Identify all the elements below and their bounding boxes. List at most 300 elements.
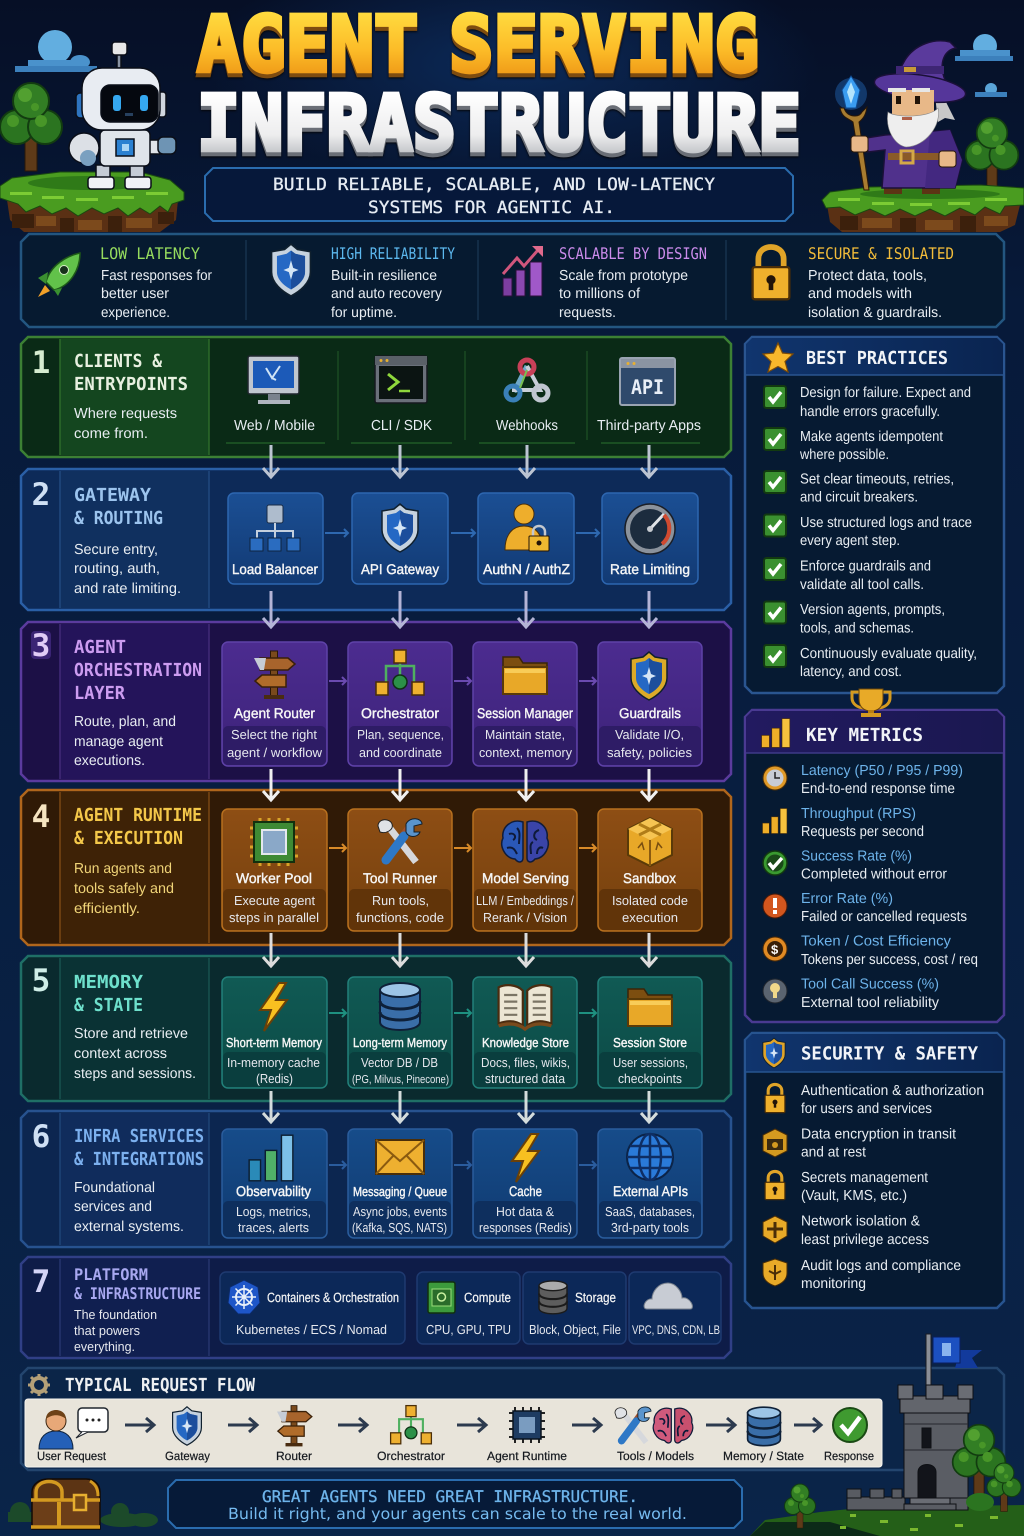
quality: high reliability: HIGH RELIABILITY [331,244,455,263]
card: session manager: context, memory [479,745,572,760]
metric: token cost [763,934,978,968]
layer heading: & INFRASTRUCTURE [74,1284,201,1303]
flow arrow [794,1418,821,1432]
flow step: user request: User Request [37,1449,107,1463]
icon: user with speech bubble [39,1408,108,1449]
item: audit logs: Audit logs and compliance [801,1258,961,1274]
card: load balancer [228,493,323,584]
flow step: orchestrator [377,1406,445,1463]
flow arrow [706,1418,735,1432]
subtitle banner: BUILD RELIABLE, SCALABLE, AND LOW-LATENCY [273,175,715,195]
item: authentication: Authentication & authorization [801,1083,984,1099]
card: tool runner: Tool Runner [363,870,437,886]
layer number 6: 6 [32,1119,50,1155]
icon: folder [628,989,672,1026]
layer heading: ORCHESTRATION [74,660,202,681]
layer heading [74,1126,204,1170]
icon: rocket [38,253,80,297]
layer number 5: 5 [32,963,50,999]
layer heading: & STATE [74,995,143,1016]
ground [750,1505,1024,1536]
layer heading [74,485,163,529]
metric: throughput [763,806,924,840]
card: session store [598,977,702,1088]
card: load balancer: Load Balancer [232,561,318,577]
treasure chest with bushes [8,1479,158,1529]
card: guardrails: Guardrails [619,705,681,721]
panel: best practices [745,337,1004,693]
item: versioning [764,602,945,636]
flow step: tools and models: Tools / Models [617,1449,694,1463]
item: structured logs: every agent step. [800,533,900,549]
card: observability [222,1129,327,1238]
flow arrows between gateway cards [325,529,599,537]
panel: layer 4 agent runtime [21,790,731,945]
item: webhooks: Webhooks [496,418,558,434]
panel: layer 6 infra services [21,1111,731,1247]
card: storage [523,1272,626,1344]
flow strip background [25,1399,882,1467]
layer description: Where requests [74,406,177,422]
card: messaging queue [348,1129,452,1238]
layer number 7: 7 [32,1264,50,1300]
quality: secure and isolated: SECURE & ISOLATED [808,244,954,263]
card: external apis [598,1129,702,1238]
card: short-term memory: (Redis) [256,1071,293,1086]
card: cache: responses (Redis) [479,1220,572,1235]
item: encryption [763,1126,956,1160]
metric: error rate: Failed or cancelled requests [801,909,967,925]
icon: shield [763,1038,785,1068]
metric: throughput: Throughput (RPS) [801,806,916,822]
tree: left of castle [784,1484,816,1528]
card: knowledge store: Knowledge Store [482,1035,569,1050]
card: model serving: Rerank / Vision [483,910,567,925]
flow arrow [572,1418,601,1432]
subtitle banner [205,168,793,221]
quality: scalable by design [503,244,707,321]
quality: scalable by design: SCALABLE BY DESIGN [559,244,707,263]
card: containers and orchestration [220,1272,405,1344]
card: worker pool: steps in parallel [229,910,319,925]
title line: Agent Serving: AGENT SERVING [197,1,759,90]
flag [926,1334,982,1388]
card: session manager: Session Manager [477,705,573,721]
icon: load balancer tree [250,505,300,551]
card: tool runner [348,809,452,931]
icon: box [628,818,672,866]
card: cache: Cache [509,1183,542,1199]
robot [69,42,176,189]
footer banner [168,1480,742,1528]
layer description: executions. [74,753,145,769]
card: cache: Hot data & [496,1204,554,1219]
flow step: memory and state [723,1407,804,1463]
title line: Infrastructure: INFRASTRUCTURE [197,80,801,169]
card: short-term memory: In-memory cache [227,1055,320,1070]
header: security and safety: SECURITY & SAFETY [801,1044,978,1064]
card: compute: CPU, GPU, TPU [426,1322,511,1337]
item: web mobile: Web / Mobile [234,418,315,434]
card: worker pool: Execute agent [234,893,315,908]
card: orchestrator: Plan, sequence, [357,727,444,742]
layer heading: ENTRYPOINTS [74,374,188,395]
item: authentication: for users and services [801,1101,932,1117]
card: storage: Block, Object, File [529,1322,621,1337]
icon: tools [378,819,422,862]
card: session store: checkpoints [618,1071,682,1086]
card: model serving: Model Serving [482,870,569,886]
item: design for failure [764,385,971,420]
card: network: VPC, DNS, CDN, LB [632,1323,720,1337]
layer description: tools safely and [74,881,174,897]
icon: webhook [506,360,548,400]
icon: terminal [375,356,427,403]
metric: token cost: Tokens per success, cost / req [801,952,978,968]
card: knowledge store: structured data [485,1071,566,1086]
card: short-term memory [222,977,327,1088]
item: timeouts: and circuit breakers. [800,490,918,506]
metric: success rate [763,848,947,882]
item: structured logs: Use structured logs and trace [800,515,972,531]
icon: monitor [248,356,299,404]
castle tower [898,1385,973,1510]
metric: success rate: Completed without error [801,866,947,882]
flow step: agent runtime: Agent Runtime [487,1449,567,1463]
icon: lightning bolt [260,983,287,1031]
card: rate limiting: Rate Limiting [610,561,690,577]
bushes [8,1502,158,1527]
item: audit logs [763,1258,961,1292]
card: session manager: Maintain state, [485,727,565,742]
item: structured logs [764,514,972,549]
header: flow heading: TYPICAL REQUEST FLOW [65,1375,255,1396]
card: orchestrator [348,642,452,766]
item: versioning: tools, and schemas. [800,620,914,636]
quality: secure and isolated [753,244,954,321]
quality: secure and isolated: isolation & guardrails. [808,305,942,321]
card: short-term memory: Short-term Memory [226,1035,322,1050]
layer heading: AGENT RUNTIME [74,805,202,826]
icon: envelope [376,1140,424,1174]
layer description [74,714,176,769]
card: compute [417,1272,520,1344]
item: encryption: Data encryption in transit [801,1126,956,1142]
header: key metrics: KEY METRICS [806,725,923,746]
header: best practices: BEST PRACTICES [806,348,948,369]
flow step: user request [37,1408,108,1463]
card: external apis: SaaS, databases, [605,1204,695,1219]
card: compute: Compute [464,1290,511,1305]
layer heading: MEMORY [74,972,143,993]
card: authn authz [478,493,574,584]
metric: latency [763,763,963,797]
flow arrow [125,1418,154,1432]
cloud: left [15,30,97,72]
layer description: and rate limiting. [74,581,181,597]
title [197,1,801,169]
layer heading [74,1265,201,1303]
layer heading: LAYER [74,683,125,704]
icon: user with lock [505,504,549,551]
quality: low latency: LOW LATENCY [100,244,200,263]
clouds: right [955,34,1013,97]
layer description [74,406,177,442]
icon: lightning bolt [512,1134,539,1182]
metric: tool call success: External tool reliability [801,995,940,1011]
panel: key metrics [745,710,1004,1022]
layer number 2: 2 [32,477,50,513]
rubble walls [847,1489,968,1510]
footer banner: Build it right, and your agents can scale to the real world. [228,1505,687,1523]
panel: layer 3 agent orchestration [21,622,731,781]
icon: brain [502,821,548,862]
layer heading: & EXECUTION [74,828,183,849]
card: sandbox [598,809,702,931]
card: session manager [473,642,577,766]
panel: layer 7 platform and infrastructure [21,1257,731,1358]
flow arrow [338,1418,367,1432]
layer description: Foundational [74,1180,155,1196]
card: containers and orchestration: Containers & Orchestration [267,1290,399,1305]
floating island: right [822,185,1024,232]
icon: cloud [644,1283,692,1309]
quality: secure and isolated: Protect data, tools, [808,268,927,284]
flow step: orchestrator: Orchestrator [377,1449,445,1463]
item: idempotent: where possible. [799,447,889,463]
item: authentication [765,1083,984,1117]
flow step: gateway: Gateway [165,1449,210,1463]
layer heading: & INTEGRATIONS [74,1149,204,1170]
item: network isolation [763,1214,929,1248]
flow arrows between infra cards [329,1161,596,1169]
icon: shield [382,504,418,552]
flow step: response: Response [824,1449,874,1463]
item: evaluate [764,645,977,680]
card: sandbox: Isolated code [612,893,688,908]
bush: castle [966,1493,994,1511]
flow step: router: Router [276,1449,312,1463]
layer description [74,1026,196,1082]
icon: gauge [625,504,675,554]
quality: scalable by design: requests. [559,305,616,321]
card: worker pool [222,809,327,931]
item: secrets [765,1170,928,1204]
layer heading: INFRA SERVICES [74,1126,204,1147]
card: agent router: Select the right [231,727,317,742]
card: orchestrator: and coordinate [359,745,442,760]
card: guardrails [598,642,702,766]
layer description: context across [74,1046,167,1062]
flow step: gateway [165,1407,210,1463]
metric: tool call success [763,976,940,1011]
tree: right [966,118,1018,192]
card: session store: Session Store [613,1035,687,1050]
layer description: steps and sessions. [74,1066,196,1082]
card: session store: User sessions, [613,1055,688,1070]
card: observability: Logs, metrics, [236,1204,311,1219]
layer description: routing, auth, [74,561,160,577]
flow step: memory and state: Memory / State [723,1449,804,1463]
card: guardrails: safety, policies [607,745,693,760]
layer description: Store and retrieve [74,1026,188,1042]
card: knowledge store: Docs, files, wikis, [481,1055,570,1070]
item: guardrails: Enforce guardrails and [800,558,931,574]
metric: error rate [763,891,967,925]
layer heading [74,351,188,395]
flow step: response [824,1408,874,1463]
card: network [629,1272,721,1344]
layer heading: AGENT [74,637,126,658]
card: agent router [222,642,327,766]
icon: shield [272,244,310,296]
icon: gold shield [631,652,667,700]
scene: castle, trees and ground [750,1334,1024,1536]
icon: chip [250,818,298,866]
panel: layer 5 memory and state [21,956,731,1101]
quality: high reliability: and auto recovery [331,286,443,302]
item: network isolation: Network isolation & [801,1214,920,1230]
layer heading [74,972,143,1016]
panel: layer 1 clients and entrypoints [21,337,731,457]
header: key metrics [746,711,1003,753]
header: best practices [746,338,1003,375]
card: external apis: 3rd-party tools [611,1220,689,1235]
layer description: manage agent [74,734,163,750]
card: messaging queue: Async jobs, events [353,1204,447,1219]
quality: scalable by design: to millions of [559,286,641,302]
icon: trophy [852,689,890,717]
card: long-term memory: (PG, Milvus, Pinecone) [352,1074,449,1086]
quality: scalable by design: Scale from prototype [559,268,688,284]
layer heading [74,805,202,849]
layer heading: GATEWAY [74,485,151,506]
layer description [74,542,181,597]
layer description: everything. [74,1339,135,1354]
floating island: left [0,172,184,232]
card: storage: Storage [575,1290,616,1305]
item: secrets: (Vault, KMS, etc.) [801,1188,907,1204]
layer description [74,861,174,917]
layer number 3: 3 [32,628,50,664]
icon: padlock [753,247,789,299]
layer description [74,1307,157,1354]
item: third-party apps: Third-party Apps [597,418,701,434]
card: knowledge store [473,977,577,1088]
icon: database [380,983,420,1030]
item: idempotent: Make agents idempotent [800,429,943,445]
panel: security and safety [745,1033,1004,1308]
item: design for failure: handle errors gracefully. [800,404,940,420]
item: audit logs: monitoring [801,1276,866,1292]
layer description: Route, plan, and [74,714,176,730]
layer description: that powers [74,1323,140,1338]
tree: left [0,83,62,171]
item: evaluate: latency, and cost. [800,664,902,680]
subtitle banner: SYSTEMS FOR AGENTIC AI. [368,198,615,218]
card: messaging queue: (Kafka, SQS, NATS) [352,1220,447,1235]
card: rate limiting [602,493,698,584]
tree: small right [987,1463,1021,1512]
wizard [835,41,967,194]
layer number 4: 4 [32,799,50,835]
card: long-term memory: Long-term Memory [353,1035,447,1050]
icon: open book [499,985,551,1029]
card: observability: Observability [236,1183,311,1199]
quality: high reliability [272,244,455,321]
quality: high reliability: for uptime. [331,305,397,321]
footer banner: GREAT AGENTS NEED GREAT INFRASTRUCTURE. [262,1487,638,1506]
metric: token cost: $ [771,942,779,957]
item: cli sdk [371,356,432,434]
item: design for failure: Design for failure. Expect and [800,385,971,401]
card: cache [473,1129,577,1238]
layer heading: CLIENTS & [74,351,162,372]
scene: robot on floating island [0,30,184,232]
layer number 1: 1 [32,345,50,381]
metric: token cost: Token / Cost Efficiency [801,934,952,950]
item: timeouts: Set clear timeouts, retries, [800,472,954,488]
scene: wizard on floating island [822,34,1024,232]
metric: latency: Latency (P50 / P95 / P99) [801,763,963,779]
flow arrows between memory cards [329,1009,596,1017]
item: versioning: Version agents, prompts, [800,602,945,618]
card: observability: traces, alerts [238,1220,309,1235]
icon: star [763,343,793,372]
icon: globe [627,1134,673,1180]
icon: gold bars [762,719,790,747]
card: containers and orchestration: Kubernetes / ECS / Nomad [236,1322,387,1337]
card: sandbox: execution [622,910,678,925]
item: web mobile [234,356,315,434]
card: api gateway: API Gateway [361,561,439,577]
icon: folder [503,657,547,694]
card: model serving [473,809,577,931]
flow step: router [276,1406,312,1463]
card: external apis: External APIs [613,1183,688,1199]
card: model serving: LLM / Embeddings / [476,893,574,908]
flow arrows between orchestration cards [329,677,596,685]
metric: throughput: Requests per second [801,824,924,840]
icon: api window: API [631,375,664,399]
item: network isolation: least privilege access [801,1232,929,1248]
layer description: The foundation [74,1307,157,1322]
item: idempotent [764,428,943,463]
layer heading: PLATFORM [74,1265,148,1284]
item: guardrails: validate all tool calls. [800,577,924,593]
layer description: come from. [74,426,148,442]
layer description: Run agents and [74,861,172,877]
card: tool runner: Run tools, [372,893,429,908]
panel: key qualities [21,234,1004,327]
icon: kubernetes wheel [228,1280,260,1314]
icon: signpost [254,651,295,699]
layer description: services and [74,1199,152,1215]
card: long-term memory [348,977,452,1088]
card: messaging queue: Messaging / Queue [353,1184,447,1199]
item: timeouts [764,471,954,506]
item: secrets: Secrets management [801,1170,928,1186]
quality: low latency: better user [101,286,169,302]
layer description: efficiently. [74,901,140,917]
icon: growth chart [503,246,543,296]
panel: typical request flow [21,1368,1004,1470]
icon: gear [28,1374,50,1396]
card: sandbox: Sandbox [623,870,676,886]
layer description: external systems. [74,1219,184,1235]
card: guardrails: Validate I/O, [615,727,684,742]
flow arrow [228,1418,257,1432]
